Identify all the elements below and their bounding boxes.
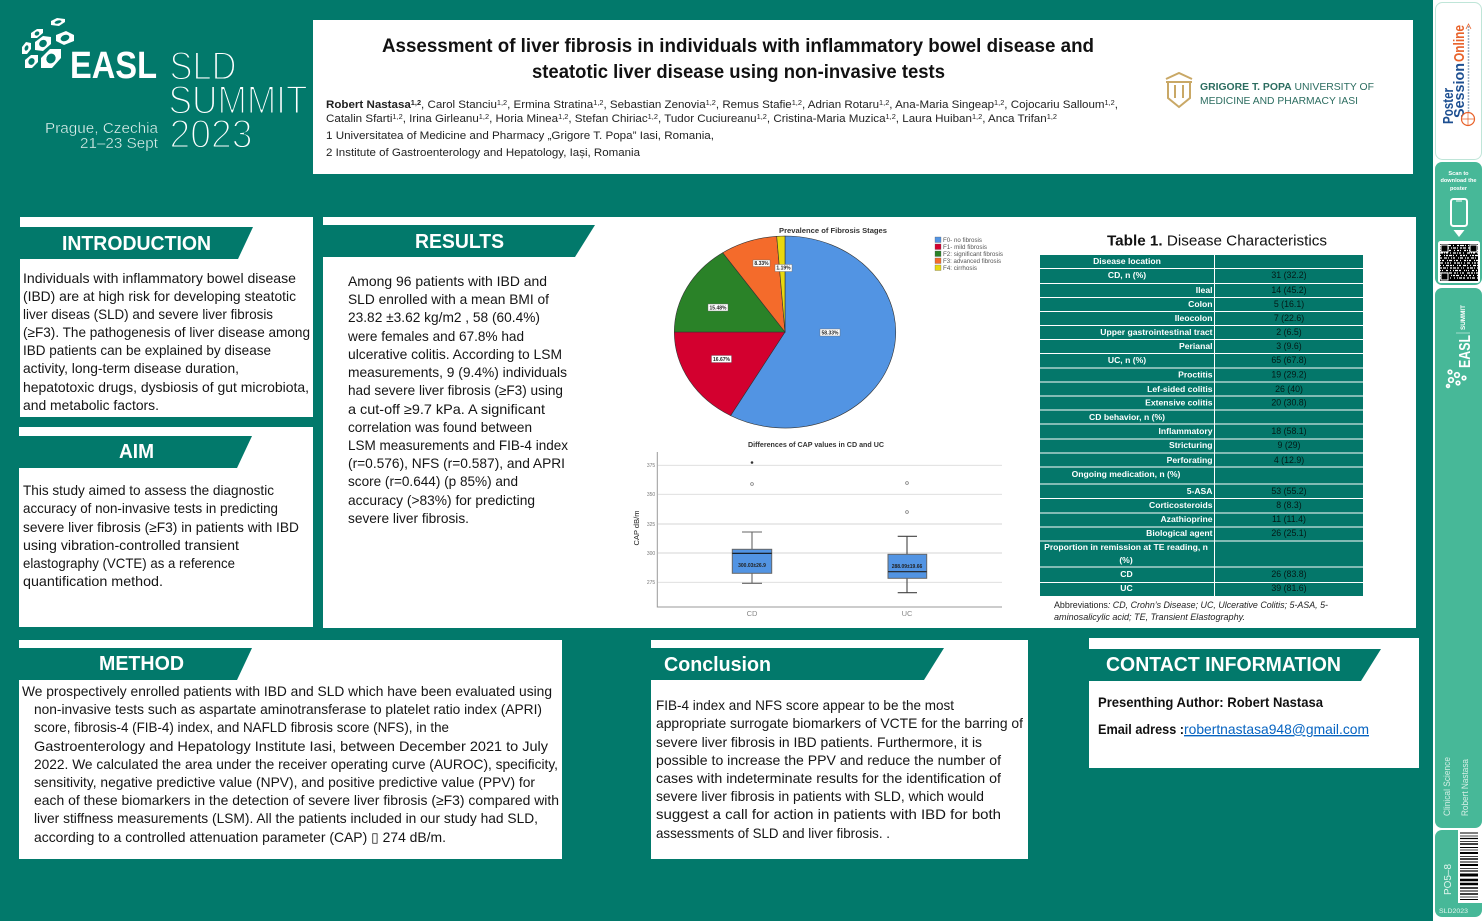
text block: method bbox=[22, 684, 559, 845]
table: disease characteristics: 7 (22.6) bbox=[1274, 313, 1304, 323]
card: Poster Session Online: Session bbox=[1451, 63, 1468, 118]
table: disease characteristics: (%) bbox=[1119, 555, 1133, 565]
text block: aim: This study aimed to assess the diagnostic bbox=[23, 483, 274, 498]
text block: aim bbox=[23, 483, 299, 589]
text block: results: were females and 67.8% had bbox=[347, 329, 524, 344]
text block: method: liver stiffness measurements (LSM). All the patients included in our study had SLD, bbox=[34, 811, 538, 826]
authors and affiliations: 1,2 bbox=[558, 114, 568, 121]
box plot: differences of CAP values in CD and UC: UC bbox=[902, 609, 913, 618]
text block: method: sensitivity, negative predictive value (NPV), and positive predictive value (PPV) for bbox=[34, 775, 535, 790]
pie chart: prevalence of fibrosis stages: Prevalence of Fibrosis Stages bbox=[779, 226, 887, 235]
text block: aim: elastography (VCTE) as a reference bbox=[23, 556, 235, 571]
card: scan to download: poster bbox=[1450, 186, 1468, 192]
text block: aim: using vibration-controlled transient bbox=[23, 538, 239, 553]
card: poster code and barcode: PO5–8 bbox=[1442, 864, 1454, 895]
authors and affiliations: 1,2 bbox=[411, 100, 421, 107]
heading: conclusion bbox=[651, 648, 944, 680]
logo: EASL SLD Summit 2023: Prague, Czechia bbox=[45, 120, 159, 137]
table: disease characteristics: Proportion in remission at TE reading, n bbox=[1044, 542, 1208, 552]
text block: results: LSM measurements and FIB-4 index bbox=[348, 438, 568, 453]
pie chart: prevalence of fibrosis stages: 16.67% bbox=[713, 357, 731, 363]
panel: contact information bbox=[1089, 638, 1419, 768]
text block: results: 23.82 ±3.62 kg/m2 , 58 (60.4%) bbox=[348, 310, 540, 325]
CD box: 300.03±26.9 bbox=[738, 563, 766, 569]
table: disease characteristics: 20 (30.8) bbox=[1271, 398, 1307, 408]
table: disease characteristics: Ileal bbox=[1196, 285, 1212, 295]
text block: method: 2022. We calculated the area under the receiver operating curve (AUROC), specificity, bbox=[34, 757, 558, 772]
sidebar bbox=[1433, 0, 1484, 921]
table: disease characteristics: Proctitis bbox=[1178, 370, 1213, 380]
box plot: differences of CAP values in CD and UC: 275 bbox=[647, 580, 655, 586]
UC box: 288.09±19.66 bbox=[892, 564, 922, 570]
legend: F2: significant fibrosis bbox=[943, 252, 1003, 258]
authors and affiliations: Robert Nastasa bbox=[326, 99, 412, 111]
table: disease characteristics: CD behavior, n (%) bbox=[1089, 412, 1165, 422]
authors and affiliations: 1,2 bbox=[392, 114, 403, 121]
contact details: Presenthing Author: Robert Nastasa bbox=[1098, 695, 1323, 710]
box plot: differences of CAP values in CD and UC: 300 bbox=[647, 551, 655, 557]
card: Poster Session Online: Poster bbox=[1440, 88, 1457, 124]
table: disease characteristics: 53 (55.2) bbox=[1271, 486, 1307, 496]
text block: results bbox=[347, 274, 568, 526]
logo: EASL SLD Summit 2023: EASL bbox=[70, 45, 157, 87]
table: disease characteristics: 18 (58.1) bbox=[1271, 426, 1307, 436]
card: poster code and barcode bbox=[1435, 830, 1482, 917]
heading: conclusion: Conclusion bbox=[664, 654, 771, 676]
table: disease characteristics: Extensive colitis bbox=[1145, 398, 1213, 408]
table: disease characteristics: 5 (16.1) bbox=[1274, 299, 1304, 309]
authors and affiliations: 1,2 bbox=[479, 114, 489, 121]
table: disease characteristics: 3 (9.6) bbox=[1276, 341, 1302, 351]
abbreviations: aminosalicylic acid; TE, Transient Elastography. bbox=[1054, 612, 1245, 622]
logo: Grigore T. Popa University bbox=[1166, 73, 1374, 107]
heading: method bbox=[19, 648, 252, 680]
heading: introduction: INTRODUCTION bbox=[62, 233, 211, 255]
authors and affiliations: , Anca Trifan bbox=[982, 113, 1047, 125]
text block: results: ulcerative colitis. According to LSM bbox=[348, 347, 562, 362]
panel: results bbox=[323, 217, 1416, 628]
table: disease characteristics: 26 (25.1) bbox=[1271, 528, 1307, 538]
card: track and author: Clinical Science bbox=[1442, 757, 1453, 816]
table: disease characteristics: Corticosteroids bbox=[1149, 500, 1213, 510]
authors and affiliations: , Cojocariu Salloum bbox=[1004, 99, 1105, 111]
text block: conclusion: assessments of SLD and liver fibrosis. . bbox=[656, 826, 890, 841]
text block: method: score, fibrosis-4 (FIB-4) index, and NAFLD fibrosis score (NFS), in the bbox=[34, 720, 449, 735]
text block: introduction: liver diseas (SLD) and severe liver fibrosis bbox=[23, 307, 273, 322]
table: disease characteristics: 19 (29.2) bbox=[1271, 370, 1307, 380]
table: disease characteristics: 39 (81.6) bbox=[1271, 583, 1307, 593]
UC box bbox=[888, 482, 927, 593]
box plot: differences of CAP values in CD and UC: 325 bbox=[647, 522, 655, 528]
table: disease characteristics: 26 (83.8) bbox=[1271, 569, 1307, 579]
authors and affiliations: , Laura Huiban bbox=[896, 113, 972, 125]
logo: EASL SLD Summit 2023: 21–23 Sept bbox=[80, 135, 159, 152]
text block: aim: severe liver fibrosis (≥F3) in patients with IBD bbox=[23, 520, 299, 535]
table: disease characteristics: 65 (67.8) bbox=[1271, 355, 1307, 365]
table: disease characteristics: 9 (29) bbox=[1278, 440, 1301, 450]
authors and affiliations: , Adrian Rotaru bbox=[802, 99, 879, 111]
text block: method: according to a controlled attenuation parameter (CAP) ▯ 274 dB/m. bbox=[34, 830, 446, 845]
authors and affiliations: 1,2 bbox=[757, 114, 767, 121]
authors and affiliations: 1,2 bbox=[994, 100, 1004, 107]
table: disease characteristics: Upper gastrointestinal tract bbox=[1100, 327, 1213, 337]
authors and affiliations bbox=[326, 99, 1118, 159]
heading: contact information bbox=[1089, 649, 1381, 681]
icon: hexagon cluster bbox=[22, 18, 74, 68]
text block: method: We prospectively enrolled patients with IBD and SLD which have been evaluated using bbox=[22, 684, 552, 699]
text block: introduction: (IBD) are at high risk for developing steatotic bbox=[23, 289, 296, 304]
authors and affiliations: , bbox=[1115, 99, 1118, 111]
legend: F4: cirrhosis bbox=[943, 266, 977, 272]
text block: results: Among 96 patients with IBD and bbox=[348, 274, 547, 289]
pie chart: prevalence of fibrosis stages: 1.19% bbox=[776, 266, 791, 272]
logo: EASL Summit vertical bbox=[1447, 305, 1474, 387]
abbreviations bbox=[1054, 600, 1328, 622]
table: disease characteristics: 8 (8.3) bbox=[1276, 500, 1302, 510]
panel: conclusion bbox=[651, 640, 1028, 859]
box plot: differences of CAP values in CD and UC bbox=[632, 442, 1002, 618]
title bbox=[382, 35, 1094, 83]
text block: conclusion: suggest a call for action in patients with IBD for both bbox=[656, 807, 1001, 822]
authors and affiliations: 1 Universitatea of Medicine and Pharmacy „Grigore T. Popa” Iasi, Romania, bbox=[326, 130, 714, 142]
heading: contact information: CONTACT INFORMATION bbox=[1106, 654, 1341, 676]
box plot: differences of CAP values in CD and UC: CAP dB/m bbox=[632, 511, 641, 545]
text block: method: non-invasive tests such as aspartate aminotransferase to platelet ratio index (APRI) bbox=[34, 702, 542, 717]
authors and affiliations: , Sebastian Zenovia bbox=[603, 99, 707, 111]
table: disease characteristics: 4 (12.9) bbox=[1274, 455, 1304, 465]
contact details: Email adress : bbox=[1098, 722, 1184, 737]
authors and affiliations: 1,2 bbox=[1105, 100, 1115, 107]
text block: aim: quantification method. bbox=[23, 574, 163, 589]
card: poster code and barcode: SLD2023 bbox=[1439, 908, 1468, 915]
text block: introduction: activity, long-term disease duration, bbox=[23, 361, 239, 376]
table: disease characteristics: 2 (6.5) bbox=[1276, 327, 1302, 337]
table: disease characteristics: Perianal bbox=[1179, 341, 1212, 351]
text block: results: correlation was found between bbox=[348, 420, 532, 435]
card: Poster Session Online bbox=[1436, 2, 1482, 160]
text block: results: measurements, 9 (9.4%) individuals bbox=[348, 365, 567, 380]
barcode bbox=[1460, 833, 1478, 900]
contact details: robertnastasa948@gmail.com bbox=[1184, 722, 1369, 737]
logo: EASL SLD Summit 2023: SLD bbox=[170, 44, 236, 88]
text block: conclusion: possible to increase the PPV and reduce the number of bbox=[656, 753, 1001, 768]
table: disease characteristics: 26 (40) bbox=[1275, 384, 1303, 394]
title: steatotic liver disease using non-invasive tests bbox=[532, 61, 945, 83]
logo: EASL SLD Summit 2023: SUMMIT bbox=[168, 78, 308, 122]
authors and affiliations: 1,2 bbox=[706, 100, 716, 107]
table: disease characteristics: Stricturing bbox=[1169, 440, 1212, 450]
text block: results: (r=0.576), NFS (r=0.587), and APRI bbox=[348, 456, 565, 471]
authors and affiliations: , Ermina Stratina bbox=[507, 99, 594, 111]
table: disease characteristics: Lef-sided colitis bbox=[1147, 384, 1213, 394]
table: disease characteristics: Ongoing medication, n (%) bbox=[1072, 469, 1181, 479]
table: disease characteristics: Ileocolon bbox=[1175, 313, 1212, 323]
authors and affiliations: , Ana-Maria Singeap bbox=[889, 99, 994, 111]
authors and affiliations: 1,2 bbox=[886, 114, 896, 121]
QR code bbox=[1438, 241, 1480, 283]
logo: Grigore T. Popa University: GRIGORE T. POPA UNIVERSITY OF bbox=[1200, 81, 1374, 93]
table: disease characteristics: Disease location bbox=[1093, 256, 1161, 266]
table: disease characteristics: UC bbox=[1120, 583, 1133, 593]
table: disease characteristics: Table 1. Disease Characteristics bbox=[1107, 232, 1327, 250]
text block: aim: accuracy of non-invasive tests in predicting bbox=[23, 501, 278, 516]
text block: results: severe liver fibrosis. bbox=[348, 511, 469, 526]
authors and affiliations: 2 Institute of Gastroenterology and Hepatology, Iași, Romania bbox=[326, 147, 641, 159]
authors and affiliations: 1,2 bbox=[497, 100, 507, 107]
text block: introduction: and metabolic factors. bbox=[23, 398, 159, 413]
authors and affiliations: , Remus Stafie bbox=[716, 99, 792, 111]
icon: phone bbox=[1451, 199, 1467, 237]
authors and affiliations: , Horia Minea bbox=[489, 113, 559, 125]
panel: introduction bbox=[20, 217, 313, 417]
text block: results: accuracy (>83%) for predicting bbox=[348, 493, 535, 508]
table: disease characteristics: Perforating bbox=[1167, 455, 1212, 465]
table: disease characteristics: UC, n (%) bbox=[1108, 355, 1146, 365]
text block: conclusion: FIB-4 index and NFS score appear to be the most bbox=[656, 698, 954, 713]
authors and affiliations: , Stefan Chiriac bbox=[568, 113, 648, 125]
table: disease characteristics: CD bbox=[1120, 569, 1133, 579]
abbreviations: Abbreviations: CD, Crohn’s Disease; UC, Ulcerative Colitis; 5-ASA, 5- bbox=[1054, 600, 1328, 610]
legend bbox=[935, 237, 1003, 272]
heading: results bbox=[323, 225, 595, 257]
card: Poster Session Online: Online bbox=[1451, 25, 1468, 62]
logo: EASL SLD Summit 2023 bbox=[22, 18, 308, 156]
card: scan to download: download the bbox=[1440, 178, 1477, 184]
authors and affiliations: 1,2 bbox=[1047, 114, 1057, 121]
contact details bbox=[1098, 695, 1369, 737]
heading: aim: AIM bbox=[119, 441, 154, 463]
authors and affiliations: , Cristina-Maria Muzica bbox=[767, 113, 886, 125]
text block: introduction: IBD patients can be explained by disease bbox=[23, 343, 271, 358]
legend: F0- no fibrosis bbox=[943, 238, 982, 244]
table: disease characteristics bbox=[1040, 232, 1363, 622]
legend: F3: advanced fibrosis bbox=[943, 259, 1001, 265]
table: disease characteristics: Biological agent bbox=[1146, 528, 1213, 538]
authors and affiliations: , Carol Stanciu bbox=[421, 99, 497, 111]
heading: introduction bbox=[20, 227, 253, 259]
legend: F1- mild fibrosis bbox=[943, 245, 987, 251]
CD box bbox=[732, 461, 772, 583]
card: scan to download: Scan to bbox=[1448, 171, 1469, 177]
text block: introduction: Individuals with inflammatory bowel disease bbox=[23, 271, 296, 286]
card: track and author: Robert Nastasa bbox=[1460, 758, 1471, 816]
table: disease characteristics: Inflammatory bbox=[1159, 426, 1213, 436]
table: disease characteristics: 31 (32.2) bbox=[1271, 270, 1307, 280]
table: disease characteristics: 11 (11.4) bbox=[1272, 514, 1306, 524]
table: disease characteristics: 14 (45.2) bbox=[1271, 285, 1307, 295]
authors and affiliations: Catalin Sfarti bbox=[326, 113, 389, 125]
text block: method: Gastroenterology and Hepatology Institute Iasi, between December 2021 to July bbox=[34, 739, 548, 754]
table: disease characteristics: Azathioprine bbox=[1160, 514, 1213, 524]
authors and affiliations: 1,2 bbox=[792, 100, 802, 107]
authors and affiliations: 1,2 bbox=[972, 114, 982, 121]
logo: EASL Summit vertical: SUMMIT bbox=[1461, 305, 1467, 330]
card: track and author bbox=[1435, 288, 1482, 828]
panel: method bbox=[19, 640, 562, 859]
text block: results: a cut-off ≥9.7 kPa. A significant bbox=[348, 402, 545, 417]
box plot: differences of CAP values in CD and UC: 375 bbox=[647, 463, 655, 469]
pie chart: prevalence of fibrosis stages: 58.33% bbox=[822, 330, 839, 336]
box plot: differences of CAP values in CD and UC: 350 bbox=[647, 492, 655, 498]
authors and affiliations: 1,2 bbox=[593, 100, 604, 107]
heading: results: RESULTS bbox=[415, 231, 504, 253]
title: Assessment of liver fibrosis in individuals with inflammatory bowel disease and bbox=[382, 35, 1094, 57]
text block: results: SLD enrolled with a mean BMI of bbox=[348, 292, 549, 307]
text block: method: each of these biomarkers in the detection of severe liver fibrosis (≥F3) compared with bbox=[34, 793, 559, 808]
authors and affiliations: 1,2 bbox=[879, 100, 889, 107]
heading: method: METHOD bbox=[99, 653, 184, 675]
logo: EASL SLD Summit 2023: 2023 bbox=[170, 112, 252, 156]
text block: introduction: hepatotoxic drugs, dysbiosis of gut microbiota, bbox=[23, 380, 309, 395]
box plot: differences of CAP values in CD and UC: Differences of CAP values in CD and UC bbox=[748, 442, 884, 449]
text block: introduction bbox=[23, 271, 310, 413]
text block: conclusion: cases with indeterminate results for the identification of bbox=[656, 771, 1001, 786]
pie chart: prevalence of fibrosis stages: 8.33% bbox=[754, 261, 769, 267]
text block: conclusion: severe liver fibrosis in IBD patients. Furthermore, it is bbox=[656, 735, 982, 750]
panel: aim bbox=[19, 427, 313, 627]
text block: results: had severe liver fibrosis (≥F3) using bbox=[348, 383, 563, 398]
authors and affiliations: 1,2 bbox=[648, 114, 658, 121]
text block: conclusion: severe liver fibrosis in patients with SLD, which would bbox=[656, 789, 984, 804]
table: disease characteristics: Colon bbox=[1188, 299, 1212, 309]
table: disease characteristics: 5-ASA bbox=[1187, 486, 1212, 496]
box plot: differences of CAP values in CD and UC: CD bbox=[747, 609, 758, 618]
text block: conclusion bbox=[656, 698, 1023, 841]
table: disease characteristics: CD, n (%) bbox=[1108, 270, 1146, 280]
pie chart: prevalence of fibrosis stages bbox=[674, 226, 1003, 428]
text block: conclusion: appropriate surrogate biomarkers of VCTE for the barring of bbox=[656, 716, 1023, 731]
authors and affiliations: , Tudor Cuciureanu bbox=[658, 113, 757, 125]
logo: Grigore T. Popa University: MEDICINE AND PHARMACY IASI bbox=[1200, 95, 1358, 107]
text block: introduction: (≥F3). The pathogenesis of liver disease among bbox=[23, 325, 310, 340]
panel: poster header bbox=[313, 20, 1413, 174]
text block: results: score (r=0.644) (p 85%) and bbox=[348, 474, 518, 489]
authors and affiliations: , Irina Girleanu bbox=[403, 113, 479, 125]
pie chart: prevalence of fibrosis stages: 15.48% bbox=[710, 306, 727, 312]
card: scan to download bbox=[1435, 162, 1482, 285]
heading: aim bbox=[19, 436, 252, 468]
logo: EASL Summit vertical: EASL bbox=[1457, 335, 1474, 368]
